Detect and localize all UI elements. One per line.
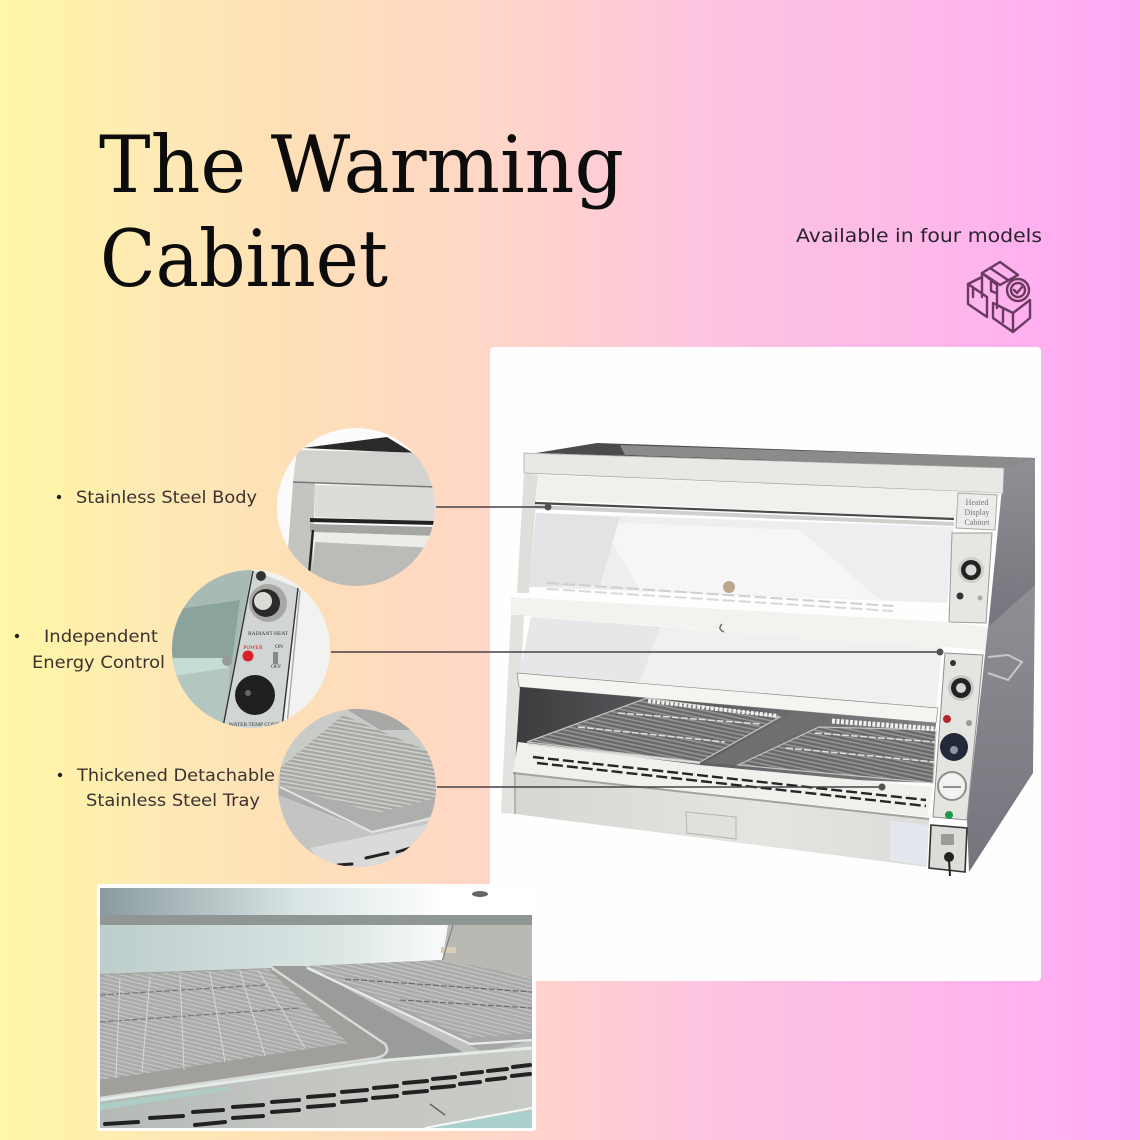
- label: thickened detachable stainless steel tray: Stainless Steel Tray: [86, 791, 260, 810]
- detail circle: independent energy control: POWER: [243, 645, 263, 651]
- upper glass: [529, 513, 954, 603]
- vent slots: [105, 1065, 530, 1125]
- name plate: [686, 812, 736, 839]
- vents: [533, 757, 926, 806]
- heated display plate: Cabinet: [965, 518, 990, 527]
- center floor: [272, 966, 465, 1062]
- label: independent energy control: [15, 627, 165, 672]
- side panels: [988, 458, 1035, 630]
- dark top surface: [536, 443, 1035, 468]
- detail circle: stainless steel tray: [278, 705, 438, 870]
- detail circle: independent energy control: OFF: [271, 664, 281, 670]
- detail circle: independent energy control: ON: [275, 644, 283, 650]
- glass clip: [720, 624, 724, 632]
- title: Cabinet: [100, 213, 388, 305]
- models caption: Available in four models: [796, 225, 1042, 247]
- label: independent energy control: Energy Control: [32, 653, 165, 672]
- right tray: [738, 721, 936, 783]
- top band: [524, 453, 1004, 493]
- lower shelf band: [517, 673, 938, 723]
- fascia: [535, 475, 1003, 518]
- left tray: [100, 968, 388, 1100]
- photo frame: [97, 884, 536, 1131]
- label: stainless steel body: Stainless Steel Body: [76, 488, 257, 507]
- detail circle: independent energy control: WATER TEMP CONT: [229, 722, 280, 728]
- upper control panel: [949, 533, 992, 623]
- front vent panel: [100, 1048, 532, 1128]
- power box: [929, 825, 967, 876]
- detail circle: independent energy control: [172, 570, 330, 728]
- detail circle: independent energy control: RADIANT HEAT: [248, 631, 289, 637]
- label: thickened detachable stainless steel tray: Thickened Detachable: [76, 766, 275, 785]
- detail circle: stainless steel body: [277, 428, 435, 590]
- handle: [988, 655, 1022, 680]
- right tray: [307, 960, 532, 1053]
- heated display plate: Heated: [966, 498, 988, 507]
- product: warming cabinet: [501, 443, 1035, 876]
- center divider: [704, 713, 830, 765]
- lower left post: [501, 615, 524, 814]
- heated display plate: Display: [965, 508, 989, 517]
- title: The Warming: [99, 119, 624, 211]
- icon: stacked boxes with check badge: [968, 262, 1030, 332]
- title: [99, 119, 624, 305]
- upper left post: [517, 473, 538, 593]
- left tray: [527, 698, 780, 762]
- leader lines with end dots: [331, 504, 944, 790]
- spec sticker: [890, 821, 928, 866]
- panel: white product panel: [490, 347, 1041, 981]
- lower glass: [520, 617, 942, 710]
- upper rail: [535, 503, 954, 611]
- photo: tray close-up: [100, 888, 532, 1128]
- interior: [515, 687, 936, 783]
- base panel: [513, 772, 929, 867]
- upper glass handle: [723, 581, 735, 593]
- middle band: [511, 597, 988, 650]
- heated display plate: [956, 493, 997, 530]
- label: independent energy control: Independent: [44, 627, 159, 646]
- front vent lip: [513, 742, 933, 817]
- lower control panel: [933, 653, 983, 820]
- label: thickened detachable stainless steel tray: [58, 766, 275, 810]
